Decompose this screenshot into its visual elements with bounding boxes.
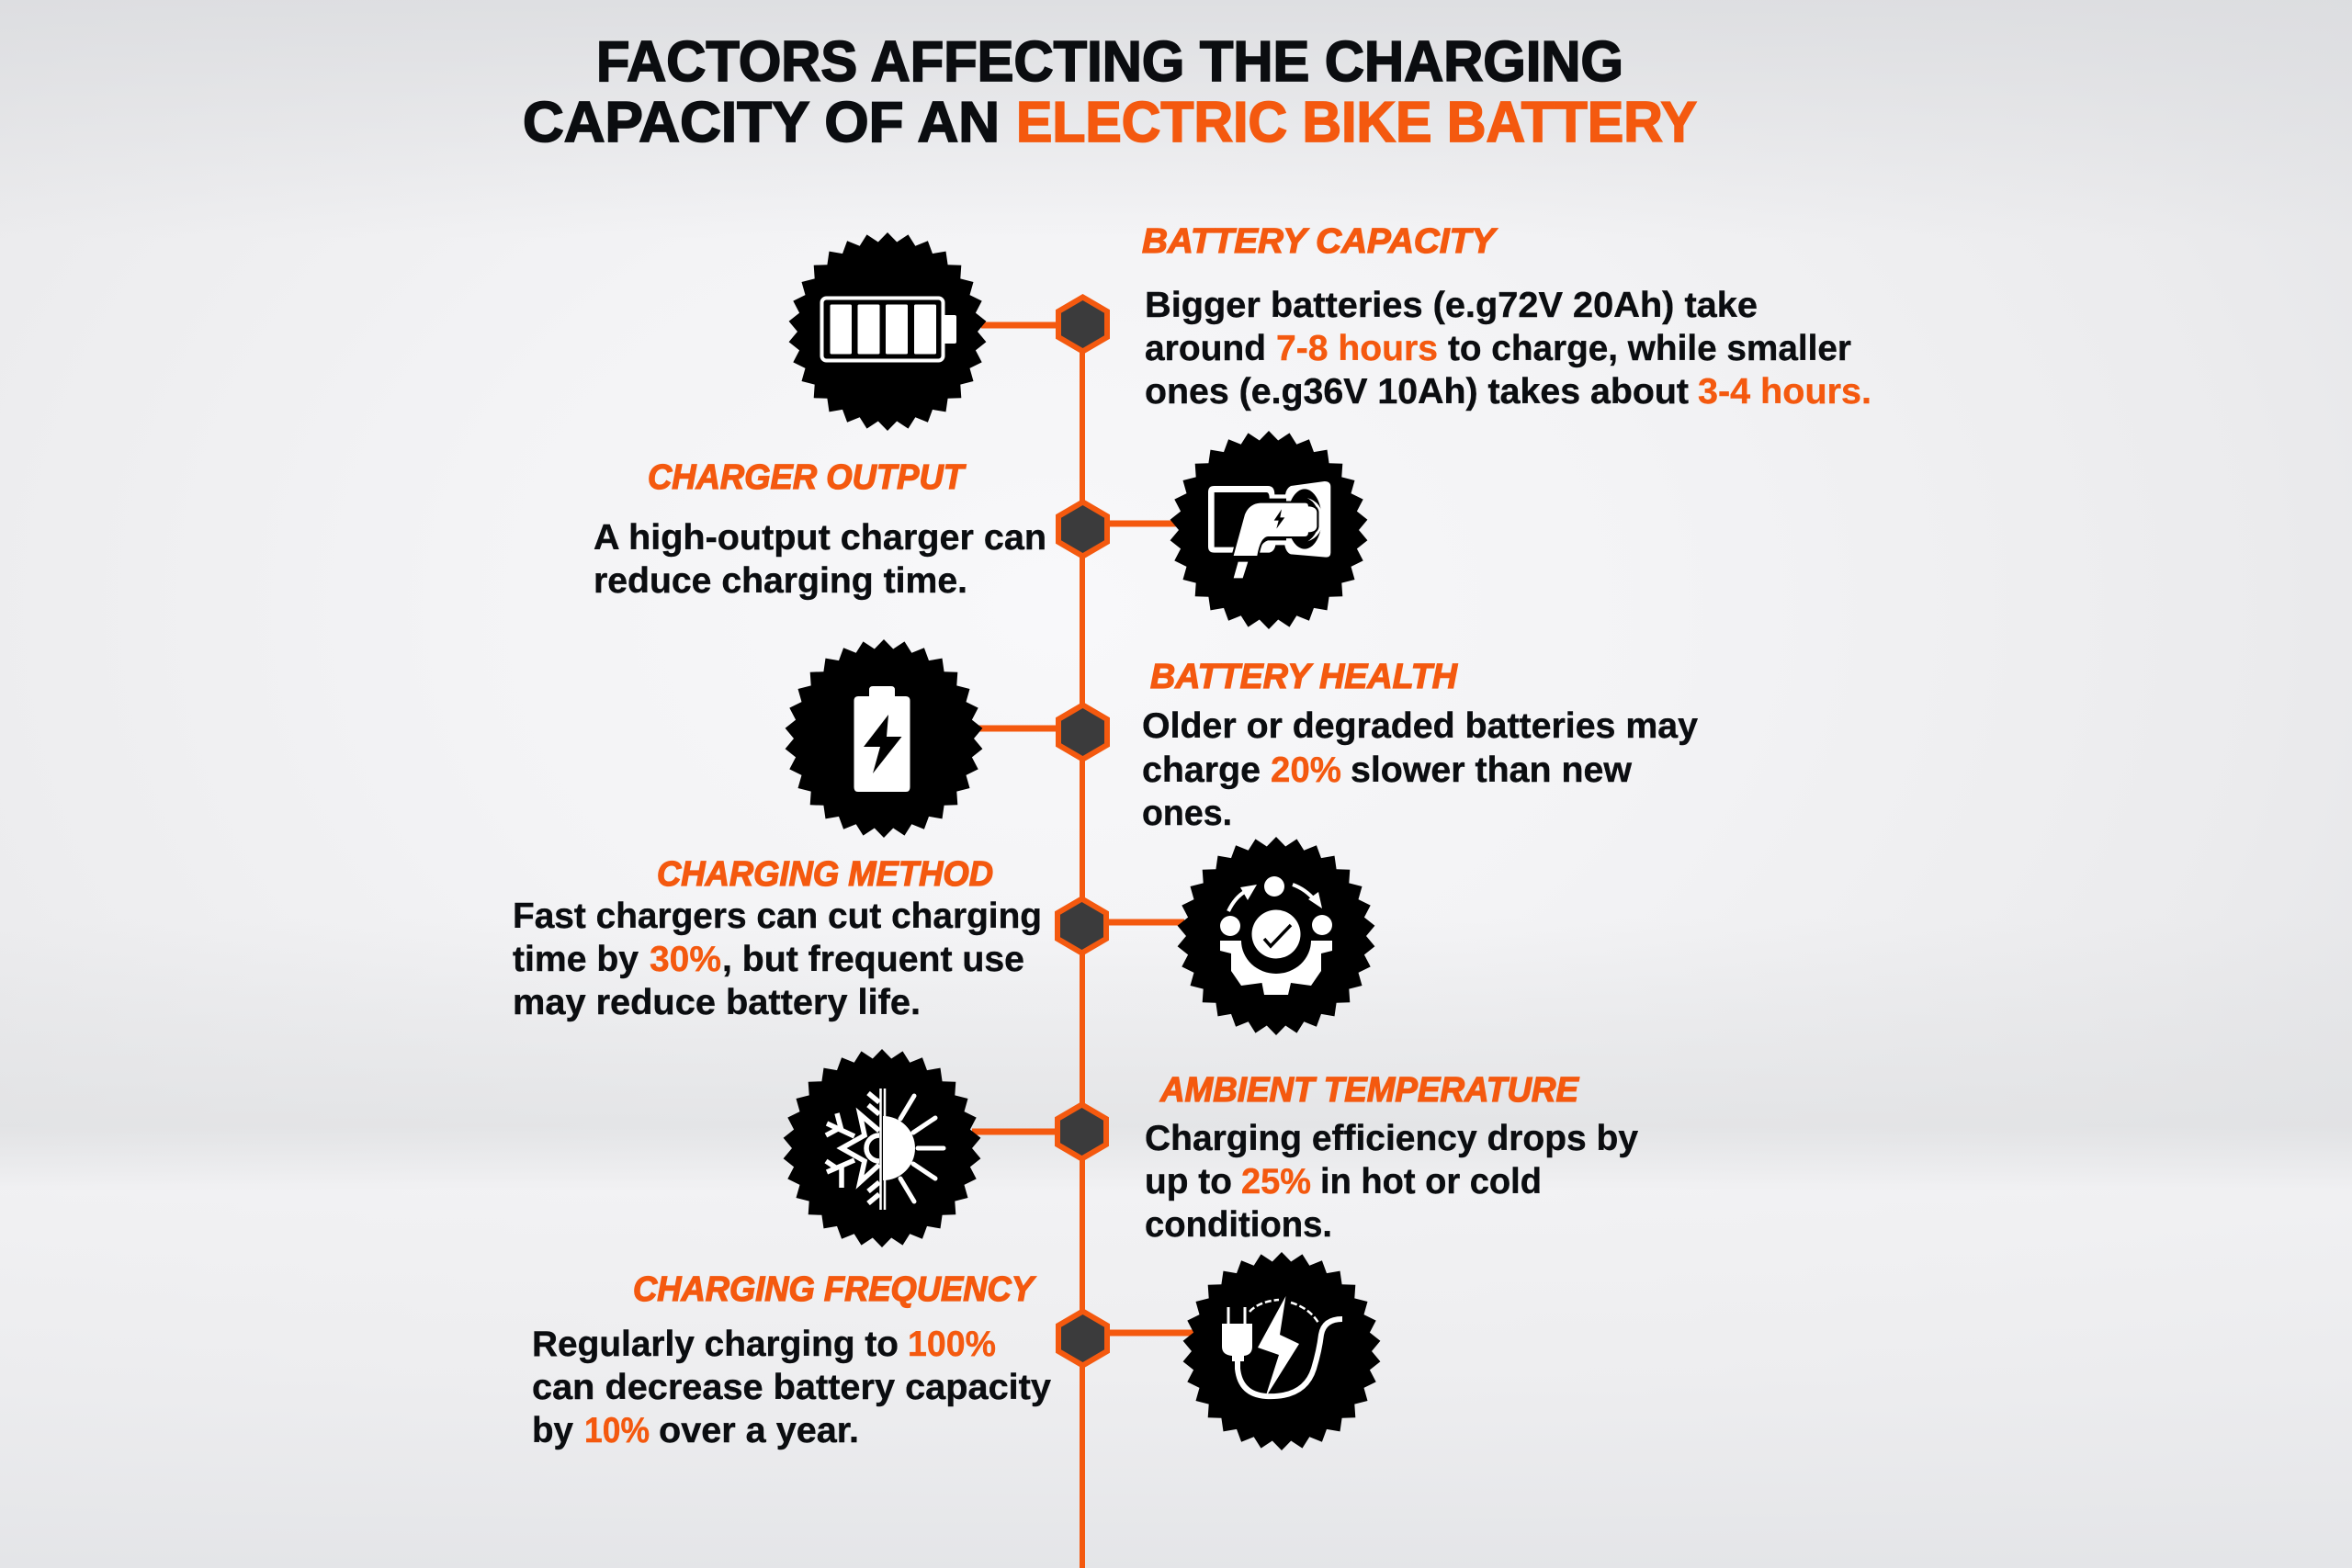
text: charger output	[594, 518, 1046, 601]
text: battery capacity: 7-8 hours	[1276, 329, 1438, 368]
text: charging frequency: 10%	[584, 1411, 650, 1450]
text: charging frequency: by	[532, 1411, 573, 1450]
timeline node: charger output	[1058, 502, 1107, 557]
text: battery health	[1142, 706, 1698, 833]
connector: battery capacity	[981, 321, 1058, 329]
heading: charger output: CHARGER OUTPUT	[648, 458, 967, 497]
icon: full battery	[789, 232, 986, 431]
panel: charging frequency	[532, 1252, 1380, 1450]
text: ambient temperature: conditions.	[1145, 1205, 1332, 1245]
text: ambient temperature	[1145, 1119, 1638, 1245]
text: charging method: may reduce battery life.	[513, 983, 921, 1022]
panel: battery health	[786, 639, 1698, 838]
title: FACTORS AFFECTING THE CHARGING	[596, 30, 1623, 94]
timeline node: battery capacity	[1058, 298, 1107, 351]
panel: charging method	[513, 837, 1374, 1035]
text: battery capacity: ones (e.g36V 10Ah) takes about	[1145, 372, 1689, 412]
text: charging method	[513, 897, 1042, 1022]
text: ambient temperature: up to	[1145, 1162, 1232, 1201]
connector: charging method	[1107, 919, 1184, 926]
icon: snowflake and sun	[784, 1049, 980, 1247]
text: battery health: ones.	[1142, 794, 1232, 833]
text: battery capacity: Bigger batteries (e.g72V 20Ah) take	[1145, 286, 1758, 325]
text: battery capacity: around	[1145, 329, 1266, 368]
text: charging frequency	[532, 1325, 1051, 1450]
text: charging frequency: Regularly charging to	[532, 1325, 899, 1364]
timeline node: battery health	[1058, 705, 1107, 759]
text: charging frequency: over a year.	[659, 1411, 859, 1450]
text: charging method: time by	[513, 940, 639, 979]
panel: battery capacity	[789, 222, 1871, 431]
text: ambient temperature: Charging efficiency drops by	[1145, 1119, 1638, 1158]
heading: charging method: CHARGING METHOD	[657, 855, 993, 894]
connector: charger output	[1107, 520, 1176, 527]
panel: charger output	[594, 431, 1367, 629]
panel: ambient temperature	[784, 1049, 1638, 1247]
timeline node: charging method	[1057, 898, 1106, 953]
timeline vertical line	[1080, 324, 1085, 1568]
text: charger output: A high-output charger can	[594, 518, 1046, 558]
icon: gear with check and cycle	[1178, 837, 1374, 1035]
icon: plug with bolt	[1183, 1252, 1380, 1450]
text: charging method: Fast chargers can cut charging	[513, 897, 1042, 936]
icon: battery with bolt	[786, 639, 982, 838]
title: ELECTRIC BIKE BATTERY	[1016, 91, 1697, 154]
text: battery health: 20%	[1271, 750, 1341, 790]
icon: EV charging plug	[1170, 431, 1367, 629]
text: ambient temperature: 25%	[1241, 1162, 1311, 1201]
timeline node: ambient temperature	[1057, 1104, 1106, 1159]
text: ambient temperature: in hot or cold	[1320, 1162, 1542, 1201]
text: battery capacity	[1145, 286, 1871, 412]
connector: ambient temperature	[972, 1128, 1058, 1135]
title	[523, 30, 1697, 154]
text: battery health: charge	[1142, 750, 1261, 790]
text: battery capacity: 3-4 hours.	[1698, 372, 1871, 412]
text: charging frequency: can decrease battery capacity	[532, 1368, 1051, 1407]
connector: charging frequency	[1107, 1330, 1194, 1336]
timeline node: charging frequency	[1058, 1312, 1107, 1365]
text: battery capacity: to charge, while smaller	[1448, 329, 1851, 368]
heading: charging frequency: CHARGING FREQUENCY	[633, 1270, 1036, 1309]
text: battery health: slower than new	[1351, 750, 1633, 790]
text: battery health: Older or degraded batteries may	[1142, 706, 1698, 746]
text: charger output: reduce charging time.	[594, 561, 967, 601]
title: CAPACITY OF AN	[523, 91, 1000, 154]
heading: ambient temperature: AMBIENT TEMPERATURE	[1159, 1071, 1580, 1110]
text: charging method: , but frequent use	[722, 940, 1024, 979]
text: charging frequency: 100%	[908, 1325, 996, 1364]
heading: battery capacity: BATTERY CAPACITY	[1142, 222, 1498, 261]
connector: battery health	[978, 726, 1058, 731]
heading: battery health: BATTERY HEALTH	[1150, 658, 1459, 696]
text: charging method: 30%	[650, 940, 721, 979]
